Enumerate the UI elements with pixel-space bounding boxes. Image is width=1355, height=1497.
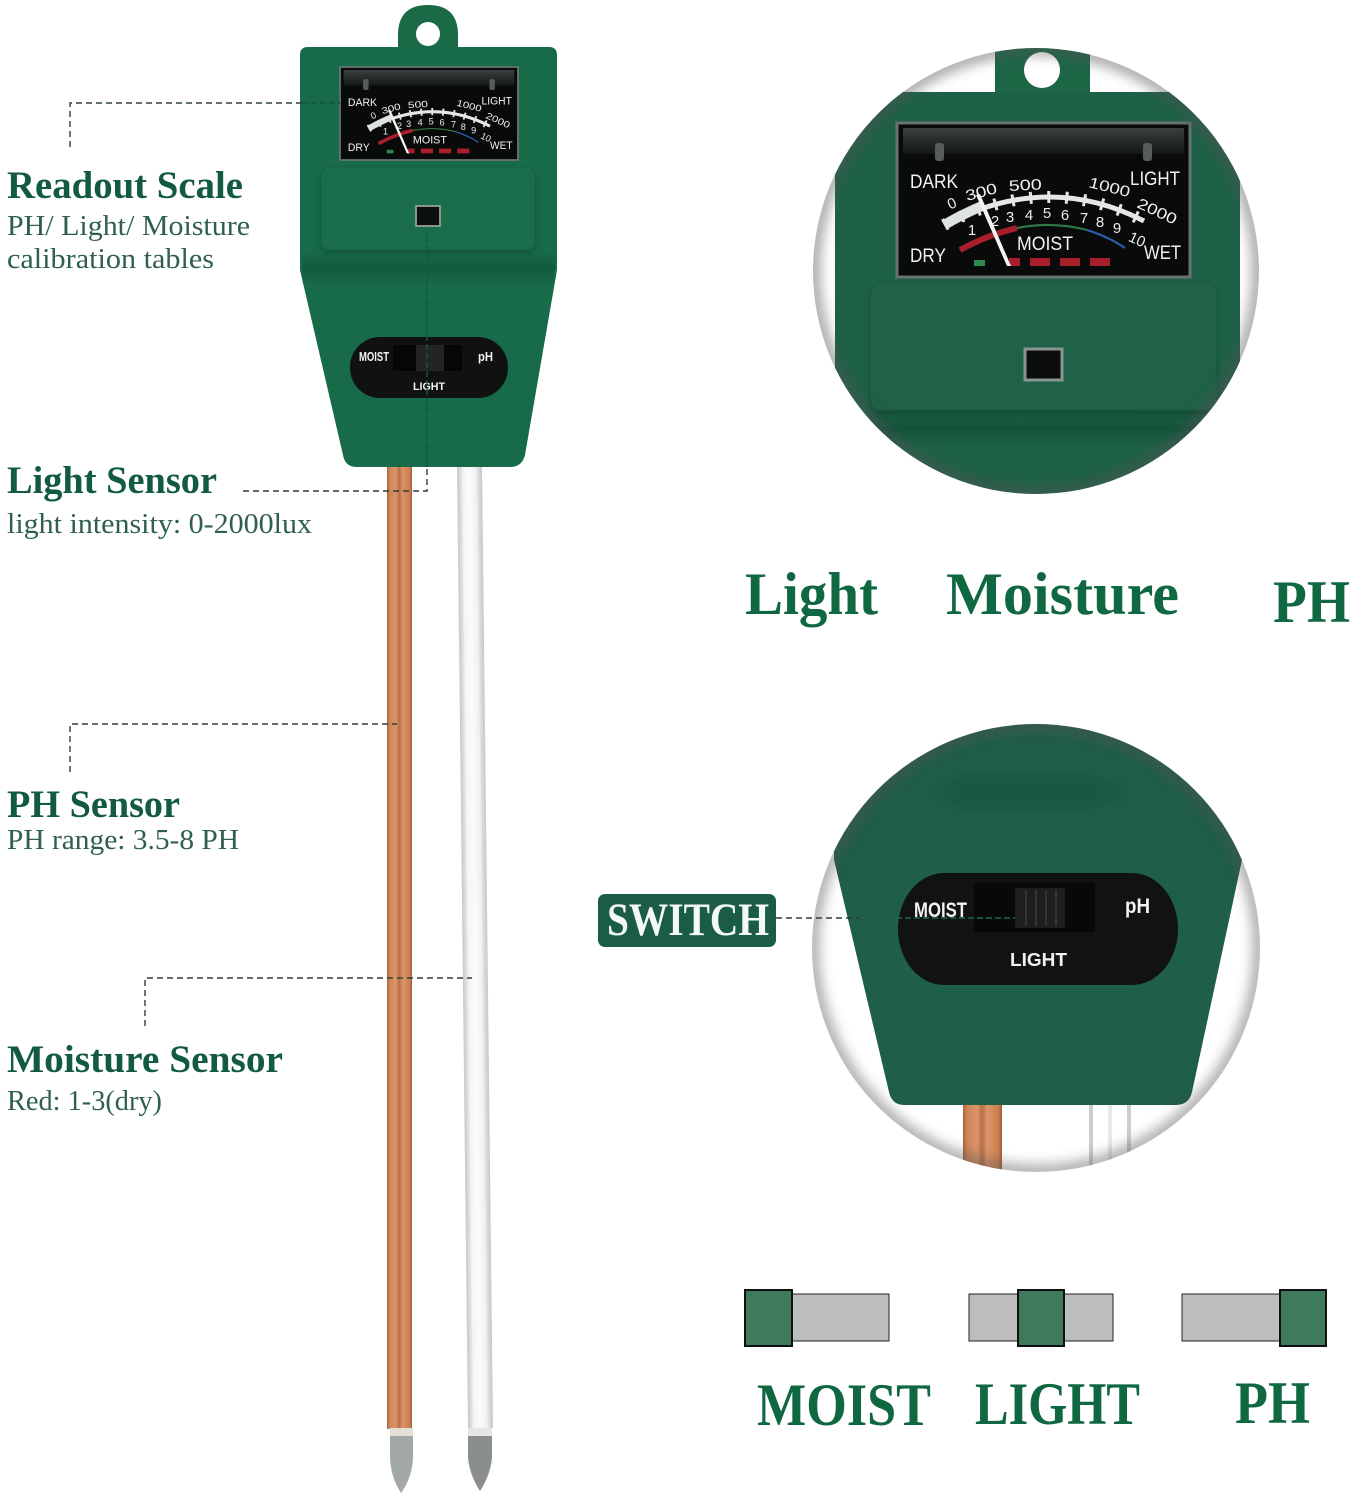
meter window: 8 bbox=[461, 122, 466, 132]
switch position: light: LIGHT bbox=[975, 1371, 1140, 1437]
switch position: PH: PH bbox=[1235, 1370, 1310, 1436]
heading: Moisture Sensor bbox=[7, 1038, 283, 1081]
labels: light moisture PH: Moisture bbox=[946, 561, 1179, 627]
meter window close-up: DRY bbox=[910, 246, 946, 267]
meter window bbox=[340, 67, 518, 160]
silver moisture probe bbox=[457, 465, 493, 1491]
labels: light moisture PH: PH bbox=[1273, 569, 1350, 635]
hanging tab bbox=[398, 5, 458, 50]
meter window: 5 bbox=[429, 116, 434, 126]
meter window: 2 bbox=[397, 121, 402, 131]
meter window close-up: 6 bbox=[1061, 207, 1069, 224]
labels: light moisture PH: Light bbox=[745, 561, 878, 627]
meter window close-up: 2 bbox=[991, 213, 999, 230]
meter window: 4 bbox=[418, 118, 423, 128]
meter window: DARK bbox=[348, 97, 377, 109]
soil meter body bbox=[300, 5, 557, 467]
switch plate close-up: MOIST bbox=[914, 899, 967, 922]
hanging tab close-up bbox=[995, 48, 1090, 92]
description: Red: 1-3(dry) bbox=[7, 1085, 162, 1117]
meter window close-up: 1000 bbox=[1087, 174, 1132, 201]
meter window close-up: 8 bbox=[1096, 214, 1104, 231]
callout: readout scale bbox=[7, 103, 340, 275]
light sensor close-up bbox=[1025, 349, 1062, 380]
heading: Light Sensor bbox=[7, 459, 217, 502]
description: light intensity: 0-2000lux bbox=[7, 508, 313, 540]
panel: readout close-up circle bbox=[810, 45, 1262, 502]
switch plate close-up: pH bbox=[1125, 895, 1150, 918]
callout: moisture sensor bbox=[7, 978, 472, 1117]
description bbox=[7, 210, 250, 275]
callout: light sensor bbox=[7, 230, 427, 540]
selector switch: pH bbox=[478, 350, 493, 364]
switch position: moist bbox=[745, 1290, 931, 1438]
switch position: moist: MOIST bbox=[757, 1372, 931, 1438]
description: PH/ Light/ Moisture bbox=[7, 210, 250, 242]
meter window: 2000 bbox=[484, 111, 512, 130]
meter window: 9 bbox=[471, 125, 476, 135]
meter window close-up bbox=[897, 123, 1190, 277]
switch position: light bbox=[969, 1290, 1140, 1437]
meter window close-up: LIGHT bbox=[1130, 169, 1180, 190]
meter window close-up: 500 bbox=[1008, 176, 1042, 195]
selector switch: LIGHT bbox=[413, 381, 445, 393]
switch plate close-up: LIGHT bbox=[1010, 950, 1067, 970]
meter window close-up: 5 bbox=[1043, 205, 1051, 222]
copper probe close-up bbox=[963, 1105, 1002, 1170]
switch position: PH bbox=[1182, 1290, 1326, 1436]
switch plate close-up bbox=[898, 873, 1178, 985]
copper PH probe bbox=[387, 465, 413, 1493]
casing close-up bbox=[834, 720, 1242, 1105]
meter window: LIGHT bbox=[482, 95, 512, 107]
light sensor housing bbox=[321, 167, 535, 254]
meter window: 1000 bbox=[456, 98, 483, 114]
heading: Readout Scale bbox=[7, 164, 243, 207]
meter window close-up: WET bbox=[1144, 243, 1181, 264]
meter window: 1 bbox=[383, 127, 388, 137]
meter window close-up: 9 bbox=[1113, 220, 1121, 237]
heading: PH Sensor bbox=[7, 783, 180, 826]
meter window: DRY bbox=[348, 142, 370, 154]
casing bbox=[300, 47, 557, 467]
meter window: MOIST bbox=[413, 135, 447, 147]
meter window close-up: 1 bbox=[968, 222, 976, 239]
casing close-up bbox=[835, 92, 1240, 502]
meter window close-up: 4 bbox=[1025, 207, 1033, 224]
light sensor housing close-up bbox=[870, 282, 1217, 416]
meter window close-up: 3 bbox=[1006, 209, 1014, 226]
meter window: 3 bbox=[406, 119, 411, 129]
light sensor bbox=[416, 206, 440, 226]
meter window: 7 bbox=[451, 119, 456, 129]
meter window: 10 bbox=[479, 131, 493, 144]
description: PH range: 3.5-8 PH bbox=[7, 824, 239, 856]
meter window: 300 bbox=[380, 101, 402, 116]
meter window: 0 bbox=[369, 110, 378, 121]
meter window close-up: 300 bbox=[964, 180, 999, 205]
meter window close-up: 2000 bbox=[1134, 195, 1180, 228]
silver probe close-up bbox=[1091, 1100, 1129, 1170]
meter window close-up: 10 bbox=[1126, 229, 1148, 251]
meter window: 6 bbox=[440, 118, 445, 128]
meter window close-up: 0 bbox=[945, 194, 959, 213]
meter window close-up: MOIST bbox=[1017, 234, 1073, 255]
description: calibration tables bbox=[7, 243, 214, 275]
callout: PH sensor bbox=[7, 724, 397, 856]
meter window: 500 bbox=[408, 99, 428, 110]
switch label: SWITCH bbox=[607, 894, 769, 946]
meter window close-up: 7 bbox=[1080, 210, 1088, 227]
switch callout line bbox=[776, 917, 1015, 919]
panel: switch close-up circle bbox=[810, 720, 1262, 1175]
labels: light moisture PH bbox=[745, 561, 1350, 635]
meter window: WET bbox=[490, 140, 513, 152]
selector switch: MOIST bbox=[359, 350, 389, 364]
selector switch bbox=[350, 337, 508, 398]
meter window close-up: DARK bbox=[910, 172, 958, 193]
